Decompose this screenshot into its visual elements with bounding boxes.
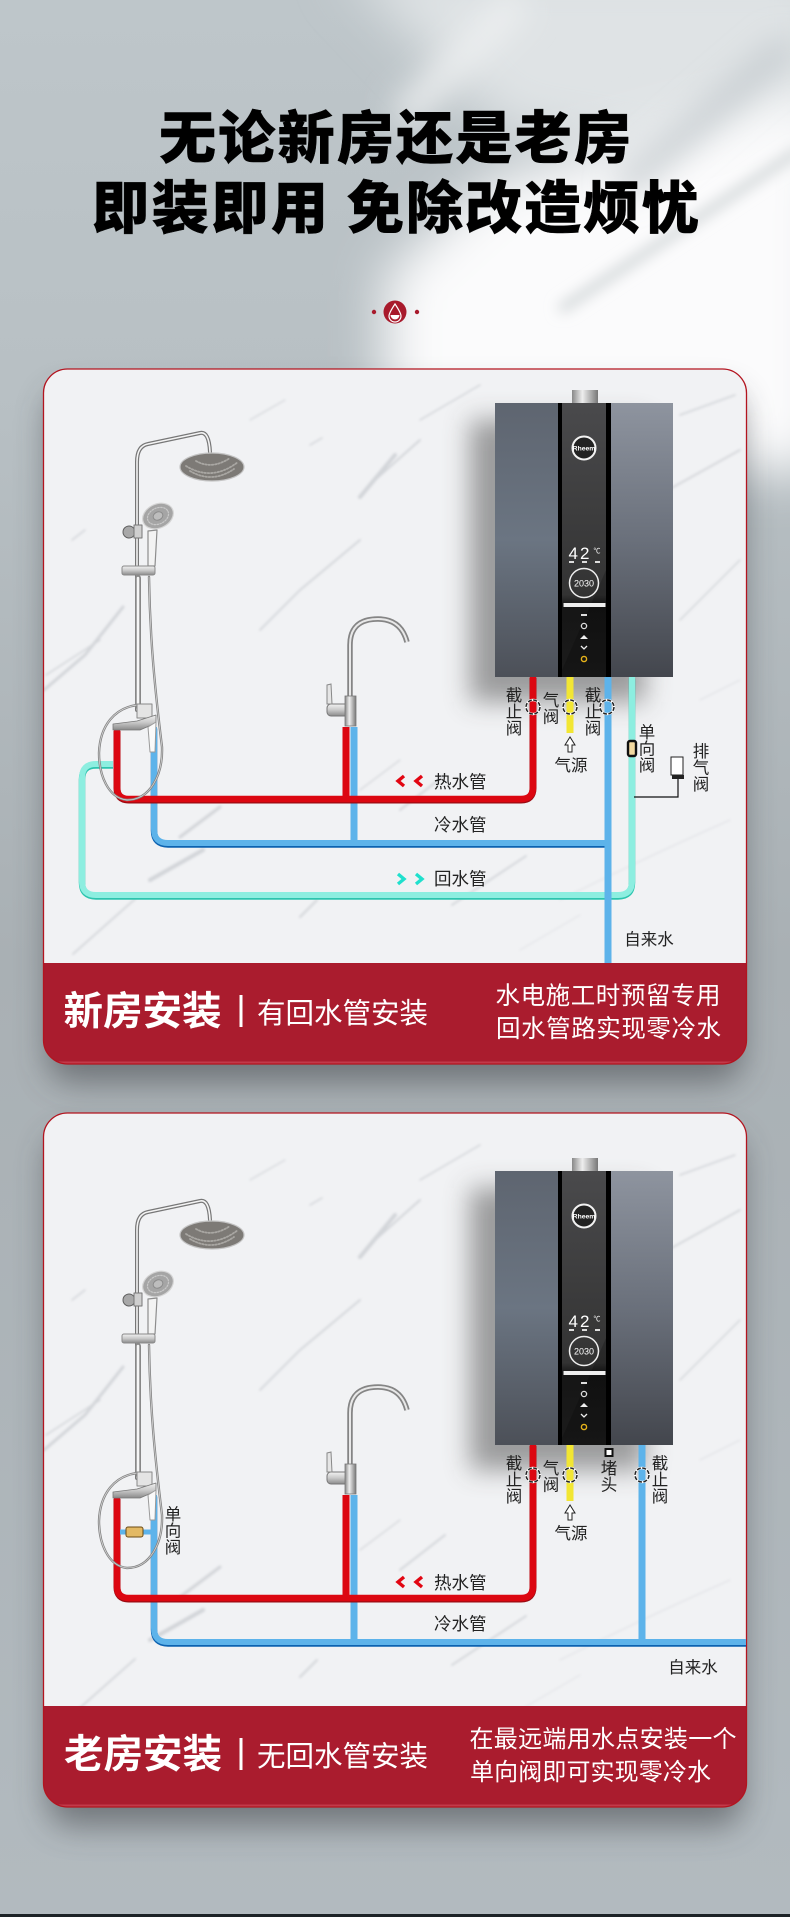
pipe labels: 止	[652, 1470, 668, 1490]
caption band: old house: 老房安装	[64, 1733, 222, 1777]
title	[92, 107, 699, 241]
pipes	[82, 677, 632, 963]
pipe labels: 冷水管	[434, 815, 486, 835]
pipe labels: 阀	[585, 719, 601, 738]
pipe labels: 单	[165, 1505, 181, 1524]
pipe labels: 向	[165, 1522, 181, 1540]
pipe labels: 阀	[693, 775, 709, 794]
panel: new house installation	[44, 369, 746, 1082]
pipe labels: 止	[506, 1470, 522, 1490]
caption band: new house: 有回水管安装	[257, 998, 428, 1030]
pipe labels: 阀	[543, 708, 559, 726]
pipe labels: 止	[585, 702, 601, 722]
pipe labels: 自来水	[624, 930, 674, 949]
caption band: old house: 无回水管安装	[257, 1741, 428, 1773]
heater shadow	[470, 420, 645, 702]
pipe labels: 阀	[652, 1487, 668, 1506]
gas water heater: Rheem	[573, 1214, 595, 1220]
icon: check valve	[126, 1527, 143, 1537]
pipe labels: 阀	[543, 1476, 559, 1494]
pipe labels: 阀	[639, 756, 655, 775]
gas water heater: 2030	[574, 1346, 594, 1356]
pipe labels: 阀	[506, 1487, 522, 1506]
gas water heater: 42	[569, 544, 591, 563]
pipe labels: 单	[639, 723, 655, 742]
heater shadow	[470, 1188, 645, 1470]
pipe labels: 排	[693, 742, 709, 761]
pipe labels: 截	[506, 686, 522, 705]
icon: gas arrow	[565, 1505, 575, 1520]
pipe labels: 气	[693, 758, 709, 778]
pipe labels	[434, 686, 709, 949]
icon: air vent valve	[634, 757, 684, 797]
pipe labels: 气源	[554, 756, 588, 775]
pipe labels: 向	[639, 740, 655, 758]
pipe labels	[165, 1454, 718, 1677]
caption band: new house: 水电施工时预留专用	[496, 982, 720, 1010]
icon: kitchen faucet	[327, 619, 407, 726]
icon: shower	[99, 1201, 244, 1568]
caption band: old house: 单向阀即可实现零冷水	[470, 1759, 711, 1786]
pipe labels: 回水管	[434, 869, 486, 889]
gas water heater: ℃	[594, 547, 600, 555]
pipe labels: 止	[506, 702, 522, 722]
caption band: new house	[64, 982, 721, 1043]
pipe labels: 阀	[165, 1538, 181, 1557]
pipe labels: 气	[543, 691, 559, 710]
pipe labels: 截	[585, 686, 601, 705]
icon: water drop ornament	[372, 300, 419, 324]
pipe labels: 气	[543, 1459, 559, 1478]
icon: kitchen faucet	[327, 1387, 407, 1494]
pipe labels: 热水管	[434, 1573, 486, 1593]
valves	[526, 700, 636, 756]
gas water heater: ℃	[594, 1315, 600, 1323]
valves	[526, 1468, 649, 1482]
caption band: new house: 回水管路实现零冷水	[496, 1015, 721, 1043]
panel: old house installation	[44, 1113, 746, 1826]
pipe labels: 截	[652, 1454, 668, 1473]
caption band: old house	[64, 1726, 736, 1786]
pipe labels: 冷水管	[434, 1614, 486, 1634]
pipes	[117, 1445, 746, 1644]
red arrows	[398, 1577, 422, 1587]
pipe labels: 热水管	[434, 772, 486, 792]
red arrows	[398, 776, 422, 786]
gas water heater: 42	[569, 1312, 591, 1331]
pipe labels: 头	[601, 1476, 617, 1494]
icon: shower	[99, 433, 244, 800]
gas water heater	[495, 390, 673, 677]
gas water heater: 2030	[574, 578, 594, 588]
caption band: old house: 在最远端用水点安装一个	[470, 1726, 736, 1753]
pipe labels: 气源	[554, 1524, 588, 1543]
title: 无论新房还是老房	[159, 107, 631, 171]
bottom edge bar	[0, 1914, 790, 1917]
icon: pipe plug	[606, 1449, 612, 1456]
pipe labels: 堵	[601, 1459, 617, 1478]
pipe labels: 自来水	[668, 1658, 718, 1677]
gas water heater: Rheem	[573, 446, 595, 452]
gas water heater	[495, 1158, 673, 1445]
icon: gas arrow	[565, 737, 575, 752]
pipe labels: 阀	[506, 719, 522, 738]
title: 即装即用	[92, 177, 328, 241]
title: 免除改造烦忧	[347, 177, 699, 241]
pipe labels: 截	[506, 1454, 522, 1473]
teal arrows	[398, 874, 422, 884]
caption band: new house: 新房安装	[64, 990, 222, 1034]
